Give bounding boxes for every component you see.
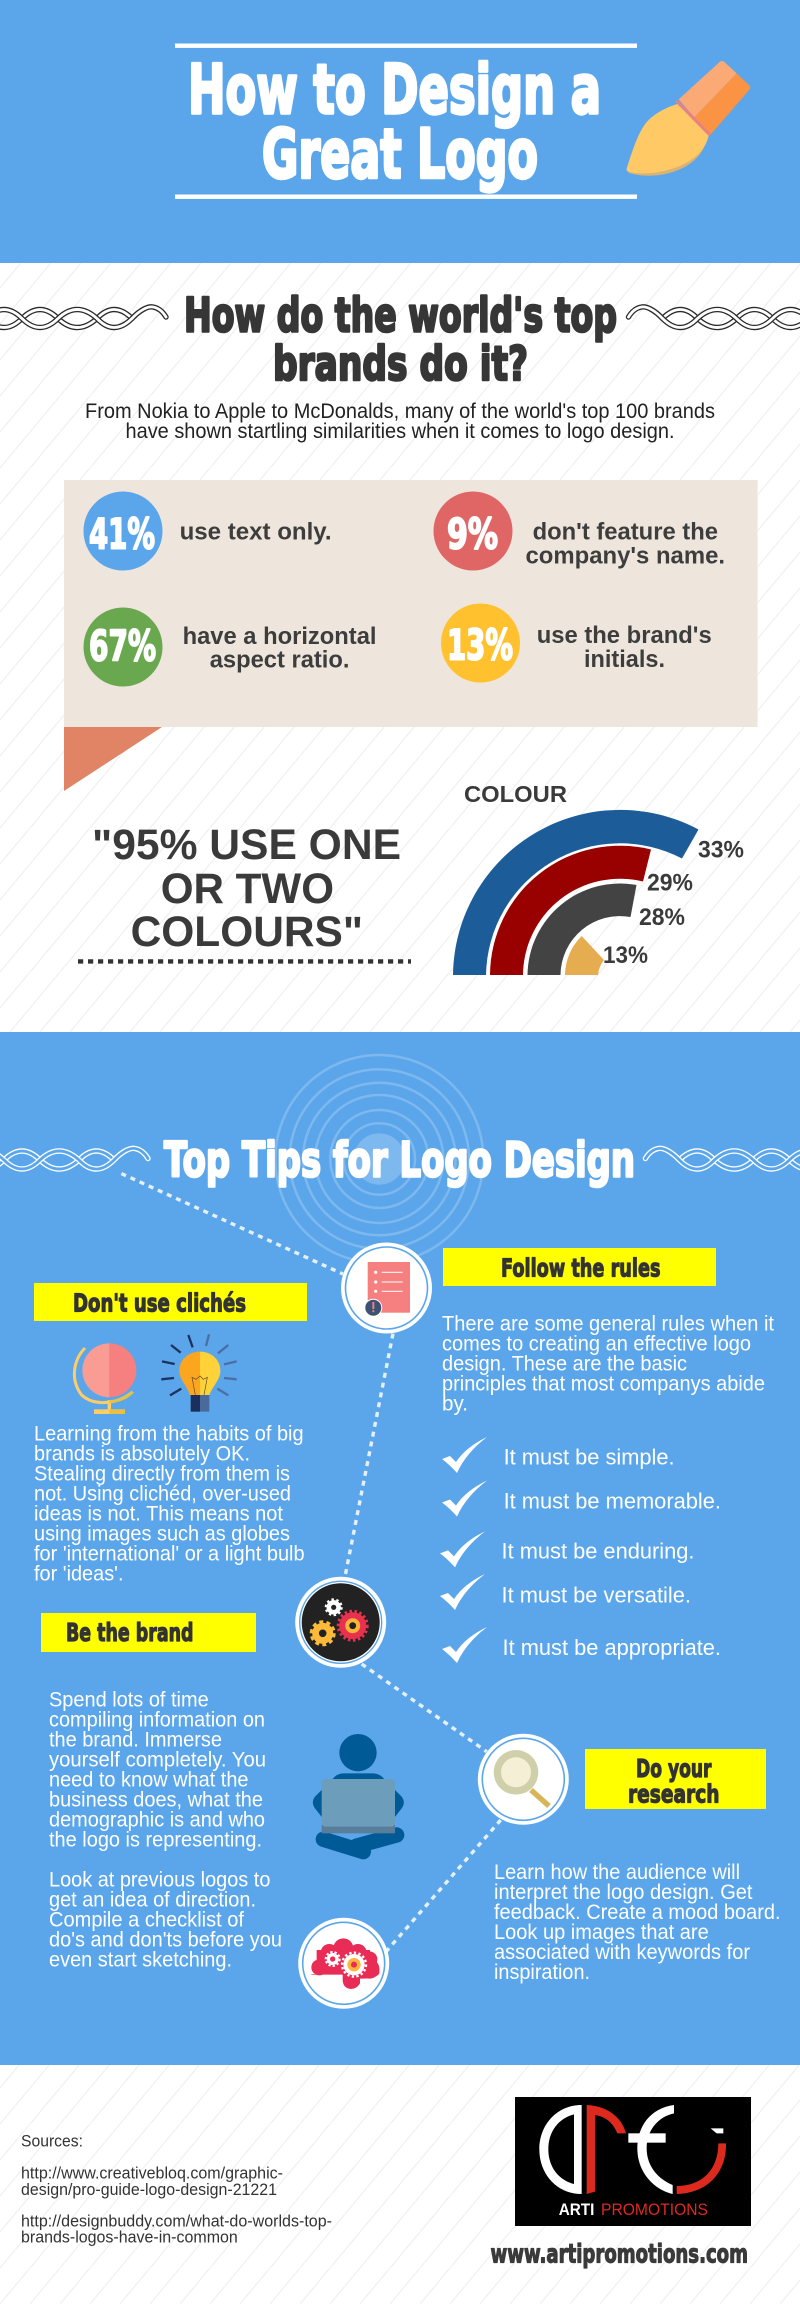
text: don't use cliches: brands is absolutely OK.	[34, 1443, 250, 1466]
text: follow the rules	[442, 1313, 774, 1416]
text: don't use cliches: for 'international' or a light bulb	[34, 1543, 305, 1566]
text: be the brand	[49, 1689, 282, 1972]
title block	[175, 44, 637, 199]
section: footer background	[0, 2065, 800, 2304]
check item: appropriate: It must be appropriate.	[502, 1635, 721, 1660]
intro text: have shown startling similarities when it comes to logo design.	[126, 420, 674, 443]
heading: top brands	[184, 288, 617, 392]
decorative rope right	[628, 307, 800, 328]
icon: brain cloud with gears	[298, 1918, 389, 2009]
label: do your research: research	[628, 1779, 720, 1808]
stat: 41% use text only: 41%	[89, 510, 155, 558]
text: do your research: Look up images that are	[494, 1921, 709, 1944]
decorative rope left	[0, 307, 166, 328]
intro text	[85, 400, 715, 443]
label: do your research	[585, 1749, 766, 1809]
bar: 33%: 33%	[698, 837, 744, 864]
gear white	[326, 1600, 342, 1615]
stat: 41% use text only	[84, 492, 332, 570]
heading: top brands: How do the world's top	[184, 288, 617, 344]
section: header background	[0, 0, 800, 263]
text: be the brand: Look at previous logos to	[49, 1869, 270, 1892]
stat: 67% horizontal ratio	[84, 608, 376, 686]
small white gear	[326, 1952, 340, 1966]
stat: 9% no company name: 9%	[447, 510, 498, 558]
text: do your research: Learn how the audience will	[494, 1861, 740, 1884]
icon: person with laptop	[313, 1734, 404, 1852]
stat: 13% initials	[441, 604, 712, 682]
label: be the brand	[41, 1613, 256, 1652]
label: don't use cliches: Don't use clichés	[73, 1288, 246, 1318]
stat: 9% no company name: company's name.	[526, 543, 725, 570]
checklist	[440, 1437, 721, 1663]
text: follow the rules: There are some general rules when it	[442, 1313, 774, 1336]
text: do your research: feedback. Create a mood board.	[494, 1901, 781, 1924]
sources: Sources:	[21, 2132, 83, 2151]
decorative rope right white	[645, 1148, 800, 1169]
stat: 9% no company name: don't feature the	[533, 519, 718, 546]
check item: memorable	[442, 1480, 721, 1516]
text: do your research: associated with keywords for	[494, 1941, 750, 1964]
text: be the brand: Spend lots of time	[49, 1689, 209, 1712]
check item: simple	[442, 1437, 675, 1473]
stat: 67% horizontal ratio: aspect ratio.	[210, 646, 350, 674]
text: don't use cliches: for 'ideas'.	[34, 1563, 124, 1586]
check item: versatile: It must be versatile.	[502, 1583, 691, 1608]
text: don't use cliches: ideas is not. This means not	[34, 1503, 283, 1526]
text: do your research: inspiration.	[494, 1961, 590, 1984]
text: be the brand: business does, what the	[49, 1789, 263, 1812]
title block: Great Logo	[262, 116, 538, 194]
bar: 28%: 28%	[639, 904, 685, 931]
sources: design/pro-guide-logo-design-21221	[21, 2180, 277, 2199]
bar: 13%: 13%	[603, 942, 648, 969]
panel fold triangle	[64, 727, 162, 791]
gear yellow	[311, 1622, 334, 1645]
stat: 41% use text only: use text only.	[180, 519, 332, 546]
text: do your research	[494, 1861, 781, 1984]
text: be the brand: get an idea of direction.	[49, 1889, 256, 1912]
stat: 13% initials: initials.	[584, 646, 665, 673]
text: don't use cliches: Learning from the habits of big	[34, 1423, 304, 1446]
logo: Arti Promotions	[515, 2097, 751, 2226]
stat: 9% no company name	[434, 492, 725, 570]
icon: magnifying glass	[478, 1734, 569, 1825]
bar: 29%: 29%	[647, 870, 693, 897]
bar: 13%	[565, 936, 648, 975]
text: follow the rules: by.	[442, 1393, 468, 1416]
text: be the brand: compiling information on	[49, 1709, 265, 1732]
intro text: From Nokia to Apple to McDonalds, many of the world's top 100 brands	[85, 400, 715, 423]
pull quote: OR TWO	[161, 865, 334, 913]
logo: Arti Promotions: ARTI	[559, 2200, 594, 2219]
text: don't use cliches: Stealing directly from them is	[34, 1463, 290, 1486]
text: be the brand: do's and don'ts before you	[49, 1929, 282, 1952]
icon: gears	[295, 1577, 386, 1668]
decorative concentric rings	[275, 1055, 483, 1263]
icon: globe	[74, 1343, 136, 1414]
pull quote: "95% USE ONE	[92, 821, 401, 869]
heading: top brands: brands do it?	[273, 337, 528, 392]
check item: enduring	[440, 1531, 694, 1567]
icon: light bulb	[161, 1334, 237, 1412]
gear red	[338, 1611, 367, 1640]
chart title: COLOUR	[464, 781, 567, 807]
pull quote: COLOURS"	[131, 908, 363, 956]
bar: 28%	[528, 884, 685, 975]
stat: 67% horizontal ratio: 67%	[89, 622, 156, 670]
text: don't use cliches	[34, 1423, 305, 1586]
label: be the brand: Be the brand	[66, 1618, 194, 1647]
check item: memorable: It must be memorable.	[504, 1489, 721, 1514]
text: follow the rules: principles that most companys abide	[442, 1373, 765, 1396]
text: follow the rules: design. These are the basic	[442, 1353, 687, 1376]
check item: versatile	[440, 1574, 691, 1610]
section: brands background	[0, 263, 800, 1033]
sources	[21, 2132, 332, 2247]
logo: Arti Promotions: PROMOTIONS	[601, 2200, 708, 2219]
sources: http://designbuddy.com/what-do-worlds-top-	[21, 2212, 332, 2231]
stat: 67% horizontal ratio: have a horizontal	[183, 623, 376, 650]
dotted connector lines	[121, 1174, 501, 1952]
pull quote	[78, 821, 411, 961]
text: be the brand: the brand. Immerse	[49, 1729, 222, 1752]
label: don't use cliches	[34, 1283, 307, 1321]
text: be the brand: yourself completely. You	[49, 1749, 266, 1772]
text: be the brand: need to know what the	[49, 1769, 248, 1792]
text: don't use cliches: not. Using clichéd, over-used	[34, 1483, 291, 1506]
section: tips background	[0, 1032, 800, 2065]
text: be the brand: even start sketching.	[49, 1949, 232, 1972]
icon: paint brush	[627, 61, 750, 176]
stat: 13% initials: 13%	[447, 620, 513, 670]
sources: brands-logos-have-in-common	[21, 2228, 238, 2247]
bar: 29%	[490, 846, 693, 975]
bar: 33%	[453, 810, 744, 975]
sources: http://www.creativebloq.com/graphic-	[21, 2164, 283, 2183]
label: do your research: Do your	[636, 1754, 712, 1783]
text: be the brand: the logo is representing.	[49, 1829, 262, 1852]
text: be the brand: demographic is and who	[49, 1809, 265, 1832]
check item: enduring: It must be enduring.	[502, 1539, 694, 1564]
decorative rope left white	[0, 1148, 148, 1169]
check item: simple: It must be simple.	[504, 1445, 675, 1470]
chart: colour usage radial bars	[453, 781, 744, 975]
title block: How to Design a	[188, 51, 601, 130]
label: follow the rules	[443, 1248, 716, 1286]
icon: rules document	[341, 1242, 432, 1334]
panel: statistics	[64, 480, 758, 727]
large white gear	[342, 1953, 366, 1977]
stat: 13% initials: use the brand's	[537, 622, 712, 649]
text: be the brand: Compile a checklist of	[49, 1909, 244, 1932]
text: don't use cliches: using images such as globes	[34, 1523, 290, 1546]
label: follow the rules: Follow the rules	[501, 1254, 660, 1282]
check item: appropriate	[442, 1627, 721, 1663]
text: do your research: interpret the logo design. Get	[494, 1881, 753, 1904]
text: follow the rules: comes to creating an effective logo	[442, 1333, 751, 1356]
